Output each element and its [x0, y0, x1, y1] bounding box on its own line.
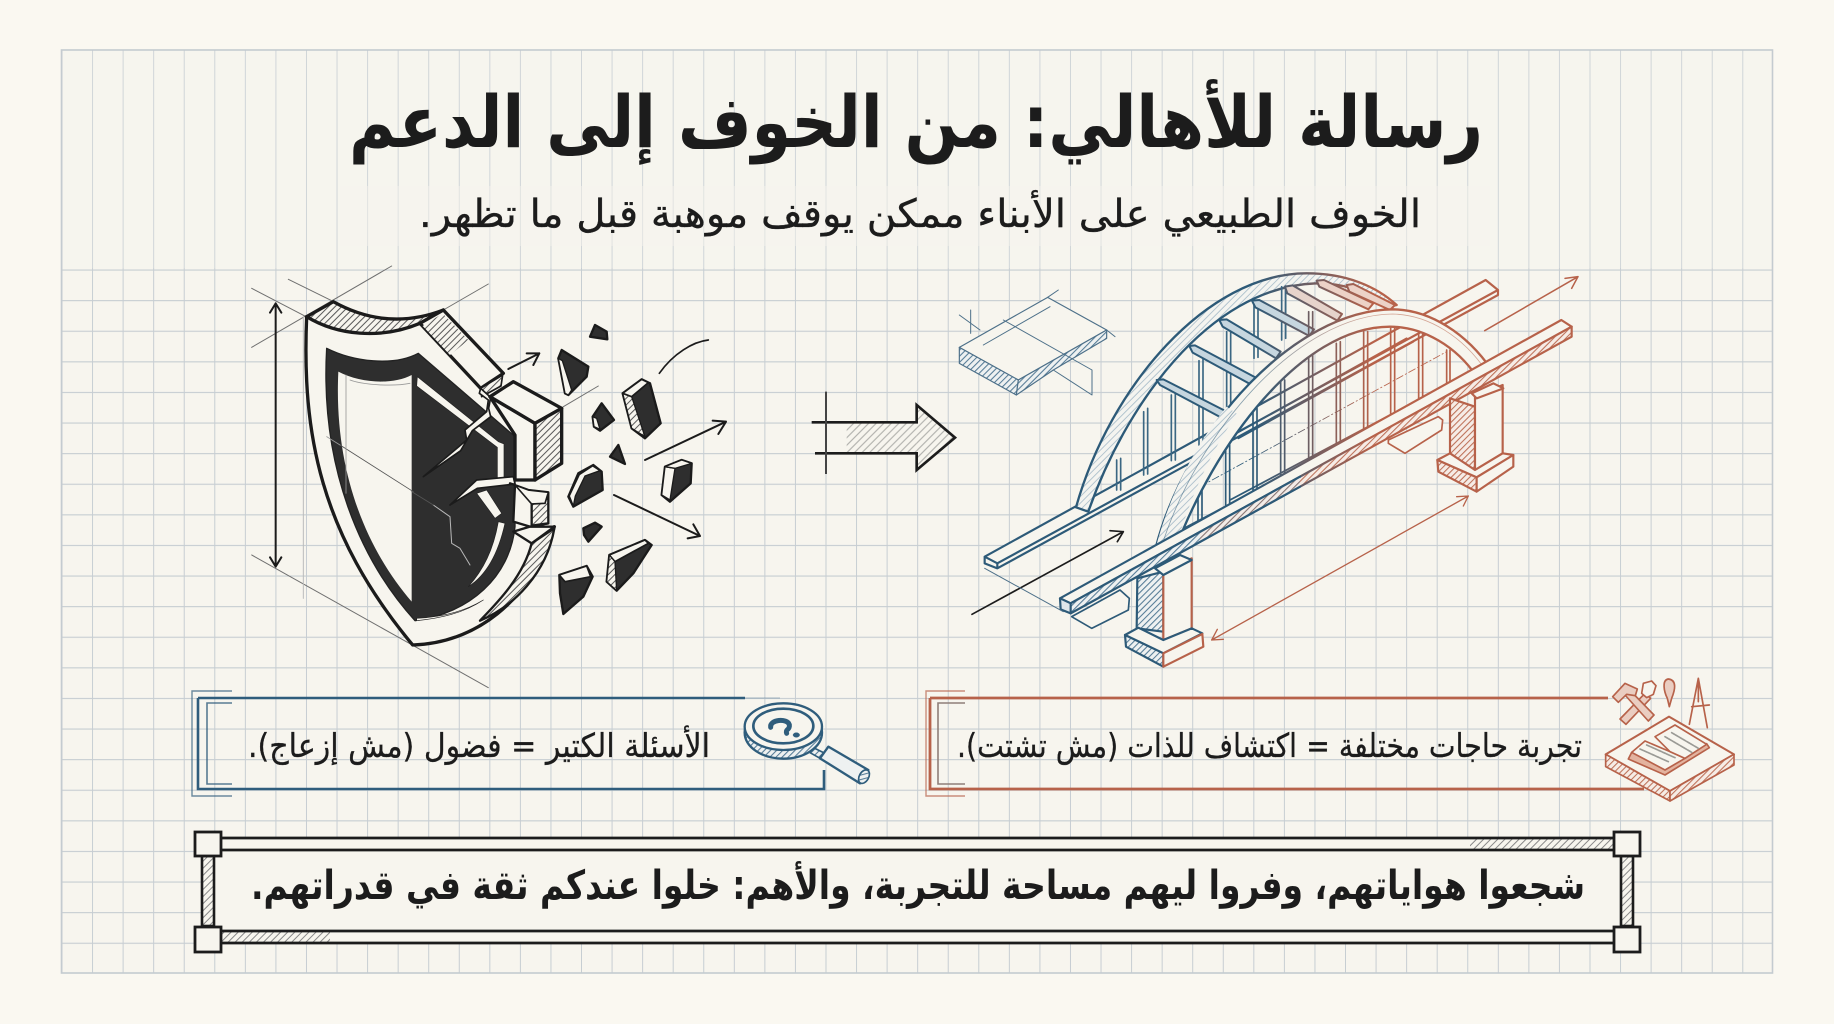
cross braces — [1157, 280, 1395, 418]
front deck — [1060, 320, 1572, 613]
mid deck lines and center line — [1184, 338, 1475, 528]
panel border — [192, 691, 824, 796]
broken shield block — [490, 382, 562, 480]
broken lower block — [510, 483, 548, 527]
construction lines — [252, 266, 598, 688]
platform — [1606, 717, 1734, 791]
front hangers — [1198, 312, 1450, 527]
shield right band — [420, 310, 503, 397]
height dimension arrow — [270, 303, 281, 567]
panel: exploration — [926, 678, 1734, 801]
motion arrows — [508, 340, 726, 538]
icon: tools and open book — [1606, 678, 1734, 801]
shield inner dark face — [326, 348, 515, 621]
span dimension arrow — [1212, 496, 1468, 640]
shield cracks — [327, 375, 515, 565]
title: رسالة للأهالي: من الخوف إلى الدعم — [349, 79, 1483, 165]
panel: key takeaway — [195, 832, 1640, 952]
center transition arrow — [812, 392, 955, 474]
panel text: الأسئلة الكتير = فضول (مش إزعاج). — [248, 725, 710, 766]
illustration: cracked shield — [252, 266, 726, 688]
construction line — [985, 568, 1063, 612]
lower hatched band — [480, 527, 554, 621]
shield light panel — [338, 372, 412, 602]
book — [1628, 744, 1709, 775]
icon: tools — [1613, 678, 1709, 728]
flying shards — [558, 325, 692, 614]
takeaway text: شجعوا هواياتهم، وفروا ليهم مساحة للتجربة، والأهم: خلوا عندكم ثقة في قدراتهم. — [251, 860, 1585, 909]
small detail block sketch — [959, 290, 1115, 395]
exit arrow — [1485, 277, 1578, 331]
takeaway frame — [195, 832, 1640, 952]
back pier — [1437, 383, 1513, 492]
subtitle: الخوف الطبيعي على الأبناء ممكن يوقف موهبة قبل ما تظهر. — [419, 189, 1421, 237]
panel text: تجربة حاجات مختلفة = اكتشاف للذات (مش تشتت). — [957, 726, 1582, 765]
back support block — [1388, 417, 1443, 453]
shield ridges — [417, 377, 505, 621]
back arch — [1076, 273, 1397, 512]
panel: curiosity — [192, 691, 872, 796]
front support block — [1072, 590, 1129, 628]
travel arrow — [972, 531, 1123, 614]
back hangers — [1117, 286, 1286, 490]
panel border — [926, 691, 1644, 796]
front arch — [1156, 309, 1492, 550]
front pier — [1125, 555, 1203, 667]
icon: magnifying glass — [745, 703, 872, 785]
shield body — [306, 302, 562, 645]
shield top band — [307, 302, 443, 333]
illustration: arch bridge — [959, 273, 1578, 667]
back deck — [985, 280, 1498, 568]
